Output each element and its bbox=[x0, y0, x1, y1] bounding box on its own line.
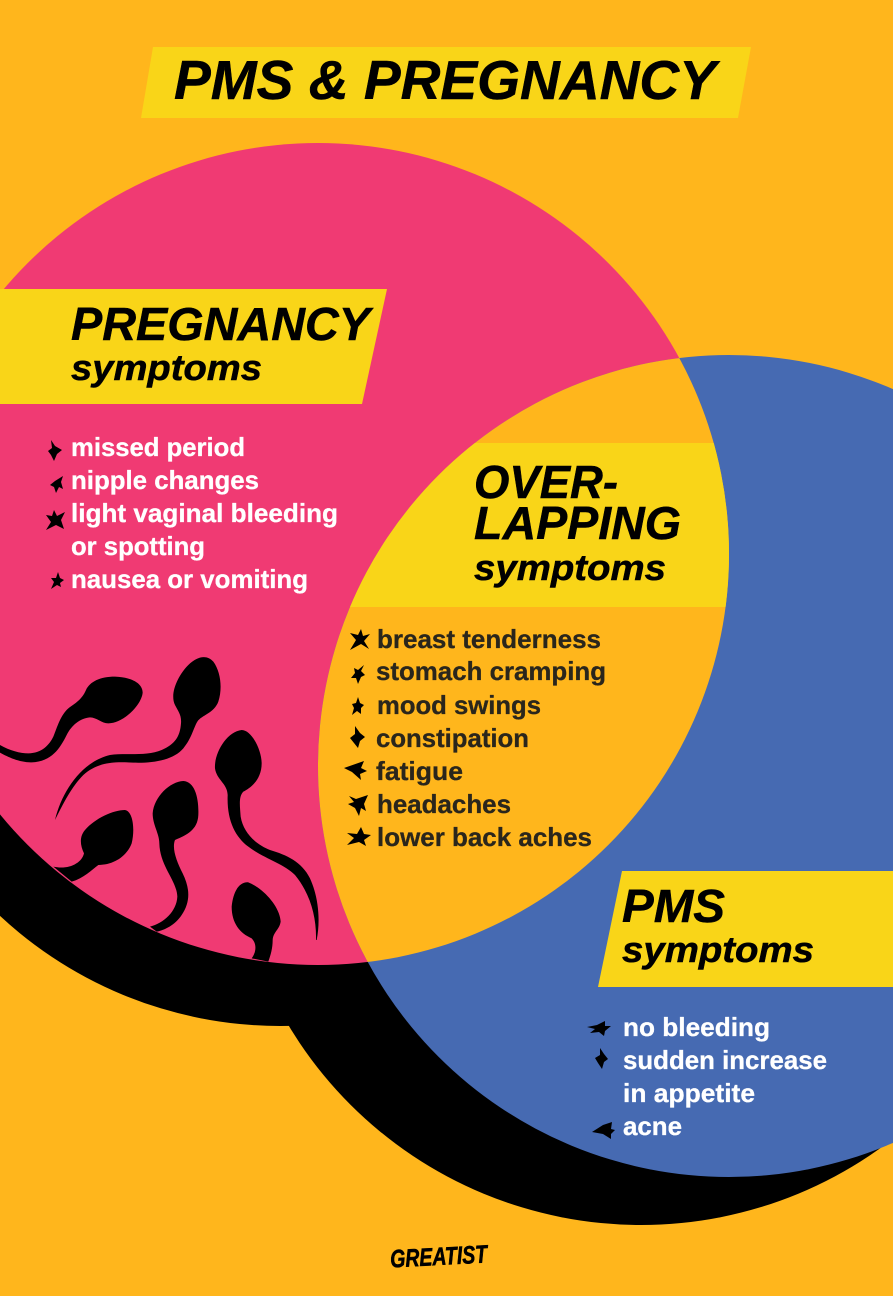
list: PMS symptoms: no bleeding bbox=[623, 1012, 770, 1042]
list: PMS symptoms: in appetite bbox=[623, 1078, 755, 1108]
heading: pregnancy symptoms bbox=[0, 289, 387, 404]
icon: star bbox=[348, 795, 368, 816]
title: PMS & PREGNANCY bbox=[174, 49, 720, 111]
icon: star bbox=[51, 572, 64, 589]
icon: star bbox=[352, 697, 364, 715]
icon: star bbox=[595, 1048, 608, 1069]
list: overlapping symptoms: mood swings bbox=[377, 690, 541, 720]
icon: star bbox=[350, 629, 370, 650]
icon: star bbox=[50, 476, 63, 493]
list: overlapping symptoms: stomach cramping bbox=[376, 656, 606, 686]
heading: pregnancy symptoms: PREGNANCY bbox=[71, 298, 374, 350]
icon: star bbox=[347, 827, 371, 846]
heading: overlapping symptoms bbox=[474, 456, 681, 588]
icon: star bbox=[350, 726, 365, 748]
panel: overlapping region bbox=[318, 358, 729, 962]
heading: overlapping symptoms: symptoms bbox=[474, 547, 666, 588]
icon: star bbox=[587, 1021, 611, 1036]
heading: PMS symptoms: symptoms bbox=[622, 929, 814, 970]
list: pregnancy symptoms: or spotting bbox=[71, 531, 205, 561]
list: PMS symptoms bbox=[587, 1012, 827, 1141]
heading: PMS symptoms bbox=[598, 871, 893, 987]
list: overlapping symptoms bbox=[344, 624, 606, 852]
heading: overlapping symptoms: OVER- bbox=[474, 456, 618, 508]
list: overlapping symptoms: breast tenderness bbox=[377, 624, 601, 654]
list: pregnancy symptoms: missed period bbox=[71, 432, 245, 462]
illustration: sperm bbox=[0, 657, 319, 962]
heading: PMS symptoms: PMS bbox=[622, 880, 725, 932]
list: overlapping symptoms: lower back aches bbox=[377, 822, 592, 852]
icon: star bbox=[351, 665, 365, 684]
icon: arrow-like star bbox=[592, 1122, 615, 1139]
list: overlapping symptoms: headaches bbox=[377, 789, 511, 819]
list: pregnancy symptoms: nipple changes bbox=[71, 465, 259, 495]
list: PMS symptoms: sudden increase bbox=[623, 1045, 827, 1075]
icon: star bbox=[48, 440, 62, 461]
icon: arrow-like star bbox=[344, 761, 367, 780]
icon: star bbox=[46, 510, 65, 530]
panel: pregnancy circle bbox=[0, 143, 729, 965]
panel: PMS circle bbox=[318, 355, 893, 1177]
list: pregnancy symptoms: light vaginal bleeding bbox=[71, 498, 338, 528]
heading: overlapping symptoms: LAPPING bbox=[474, 497, 681, 549]
list: overlapping symptoms: fatigue bbox=[376, 756, 463, 786]
heading: pregnancy symptoms: symptoms bbox=[71, 347, 262, 388]
black shadow of the circles bbox=[0, 204, 893, 1225]
list: PMS symptoms: acne bbox=[623, 1111, 682, 1141]
list: pregnancy symptoms bbox=[46, 432, 338, 594]
list: overlapping symptoms: constipation bbox=[376, 723, 529, 753]
logo: Greatist: GREATIST bbox=[389, 1240, 490, 1273]
list: pregnancy symptoms: nausea or vomiting bbox=[71, 564, 308, 594]
